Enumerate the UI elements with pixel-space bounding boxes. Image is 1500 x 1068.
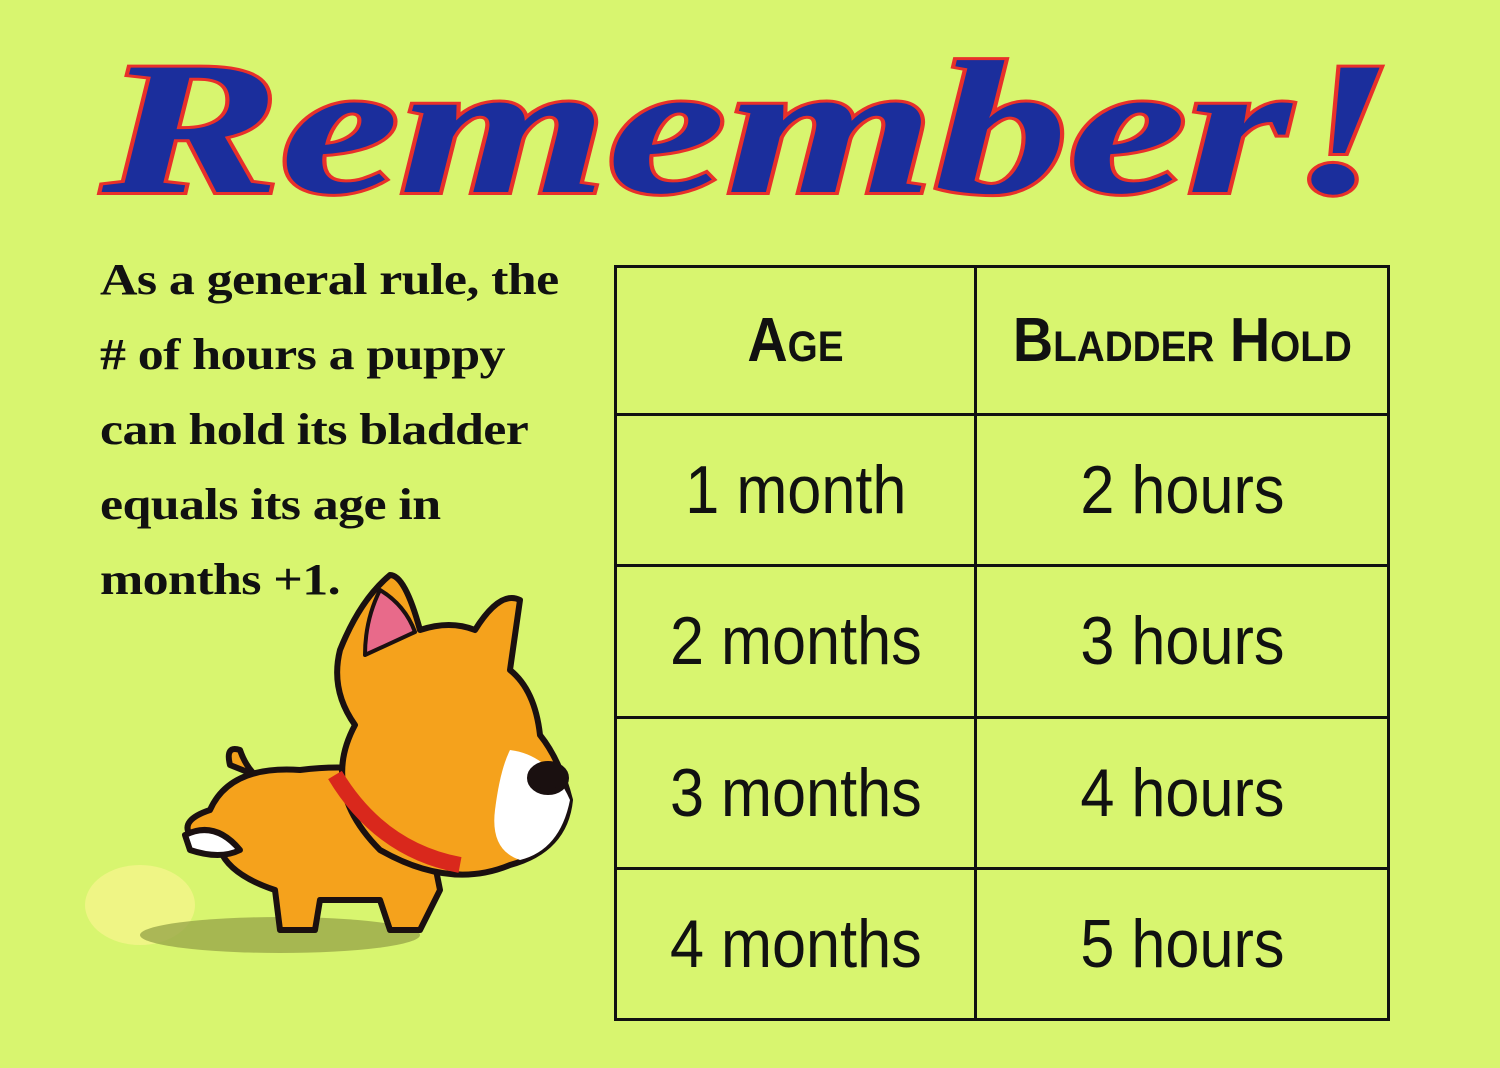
table: age vs bladder hold: 1 month: [685, 452, 906, 528]
text block: rule: # of hours a puppy: [100, 330, 505, 379]
illustration: puppy: [85, 572, 573, 953]
table: age vs bladder hold: 3 hours: [1080, 603, 1284, 679]
text block: rule: [100, 255, 559, 604]
text block: rule: equals its age in: [100, 480, 440, 529]
table: age vs bladder hold: 5 hours: [1080, 906, 1284, 982]
table: age vs bladder hold: 3 months: [670, 755, 921, 831]
table: age vs bladder hold: 4 hours: [1080, 755, 1284, 831]
table: age vs bladder hold: 2 months: [670, 603, 921, 679]
table: age vs bladder hold: 2 hours: [1080, 452, 1284, 528]
title: Remember!: [101, 24, 1395, 234]
table: age vs bladder hold: [614, 265, 1390, 1021]
text block: rule: can hold its bladder: [100, 405, 528, 454]
puddle: [85, 865, 420, 953]
text block: rule: As a general rule, the: [100, 255, 559, 304]
text block: rule: months +1.: [100, 555, 340, 604]
dog body: [185, 575, 570, 930]
table: age vs bladder hold: Age: [747, 306, 844, 375]
table: age vs bladder hold: 4 months: [670, 906, 921, 982]
table: age vs bladder hold: Bladder Hold: [1012, 306, 1352, 375]
